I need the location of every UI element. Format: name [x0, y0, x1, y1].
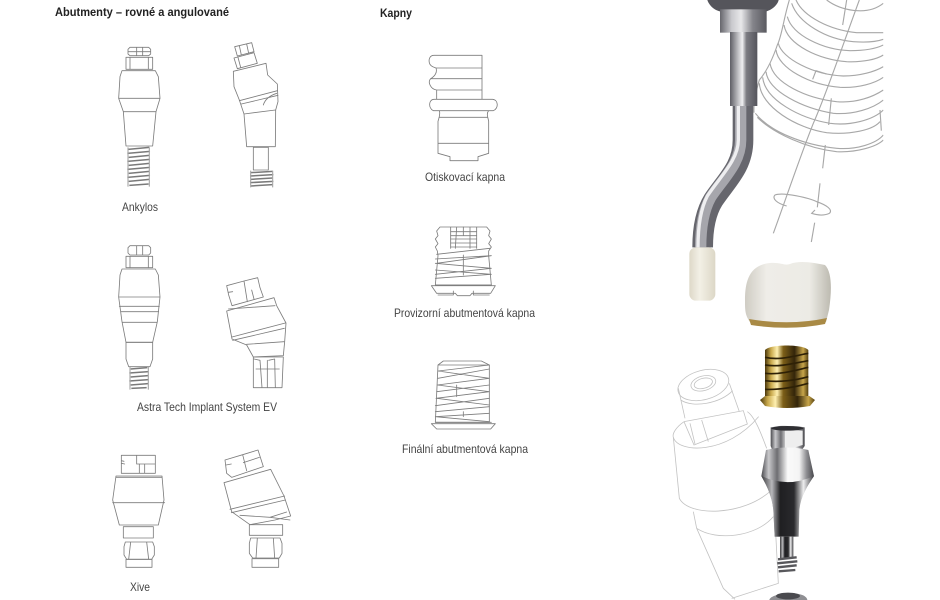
heading: abutments: Abutmenty – rovné a angulované [55, 5, 229, 19]
drawing: provisional abutment cap [431, 227, 495, 296]
abutment body [761, 447, 814, 537]
drawing: Astra Tech angled abutment [227, 278, 286, 388]
image: ceramic crown [745, 262, 831, 328]
bent shaft [698, 106, 743, 247]
tip cap [689, 247, 715, 301]
label: Xive: Xive [130, 580, 150, 594]
label: impression cap: Otiskovací kapna [425, 170, 505, 184]
drawing: Ankylos angled abutment [233, 43, 278, 187]
lower disc [769, 593, 807, 600]
drawing: Xive straight abutment [113, 455, 165, 567]
drawing: wireframe angled abutment [673, 364, 778, 599]
abutment head [771, 426, 805, 453]
drawing: Xive angled abutment [224, 450, 291, 567]
label: Ankylos: Ankylos [122, 200, 158, 214]
handle ball [707, 0, 779, 12]
heading: caps: Kapny [380, 6, 412, 20]
drawing: wireframe implant cone with rotation axis [754, 0, 883, 242]
label: provisional abutment cap: Provizorní abutmentová kapna [394, 306, 535, 320]
screw [780, 537, 793, 558]
label: Astra Tech Implant System EV: Astra Tech Implant System EV [137, 400, 277, 414]
handle collar [720, 9, 767, 33]
upper shaft [730, 32, 757, 106]
drawing: final abutment cap [431, 361, 495, 429]
image: gold abutment cap [760, 345, 815, 408]
image: metal abutment [761, 426, 814, 600]
drawing: impression cap [429, 55, 497, 161]
drawing: Ankylos straight abutment [119, 47, 160, 187]
image: dental tool handle [689, 0, 779, 301]
drawing: Astra Tech straight abutment [119, 246, 160, 390]
label: final abutment cap: Finální abutmentová kapna [402, 442, 528, 456]
